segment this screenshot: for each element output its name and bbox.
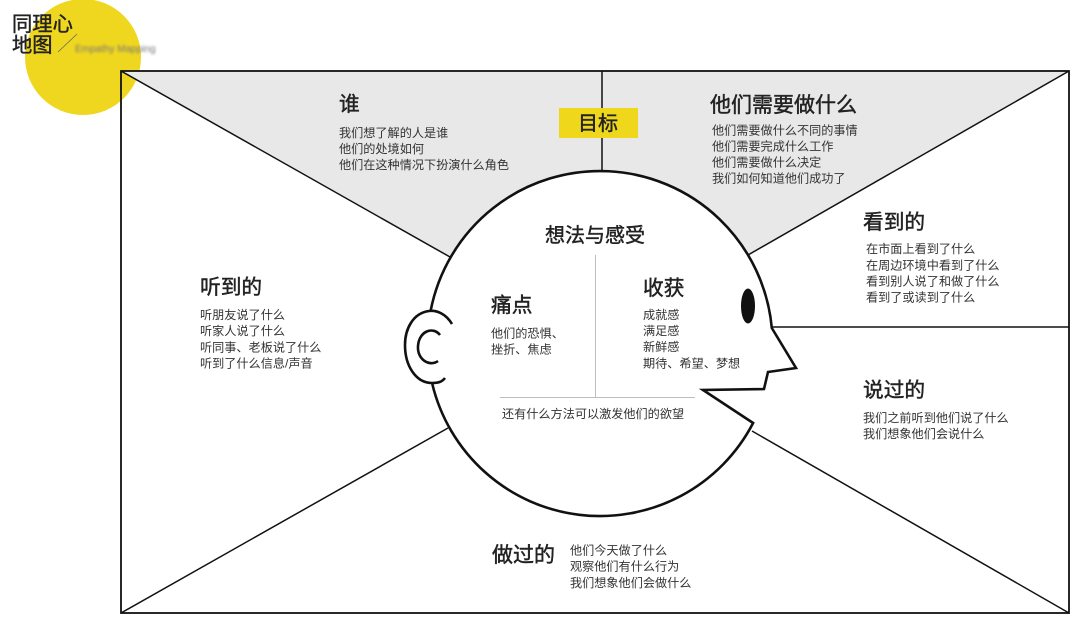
goal label [559,108,638,138]
text block: gains: 成就感 [643,307,679,322]
page title: 同理心 [12,14,73,36]
inner dividers [500,255,695,398]
text block: who: 他们的处境如何 [339,141,424,156]
text block: who: 我们想了解的人是谁 [339,125,448,140]
text block: hear: 听到了什么信息/声音 [200,356,313,370]
text block: see: 看到的 [863,211,925,234]
text block: said [863,379,1009,441]
icon: eye [741,288,755,324]
text block: hear: 听同事、老板说了什么 [200,340,321,354]
text block: do: 我们想象他们会做什么 [570,575,691,590]
icon: ear [405,311,452,383]
text block: said: 我们之前听到他们说了什么 [863,410,1009,425]
text block: who [339,93,509,172]
page title: 地图 [12,34,53,57]
text block: hear [200,276,321,370]
text block: gains: 满足感 [643,323,679,338]
text block: said: 我们想象他们会说什么 [863,426,984,441]
text block: do: 他们今天做了什么 [570,542,667,558]
text block: said: 说过的 [863,379,925,402]
text block: see: 看到别人说了和做了什么 [866,274,1000,288]
text block: hear: 听家人说了什么 [200,323,285,338]
yellow circle [25,0,141,115]
text block: hear: 听朋友说了什么 [200,307,285,322]
text block: pains: 他们的恐惧、 [491,326,564,340]
text block: who: 谁 [339,93,360,116]
text block: what they need to do: 我们如何知道他们成功了 [712,170,846,186]
panel: grey top area [121,71,1069,257]
text block: pains: 痛点 [491,294,532,317]
text block: see: 在周边环境中看到了什么 [866,258,1000,272]
text block: do: 做过的 [492,544,555,567]
heading: thoughts and feelings: 想法与感受 [545,224,645,247]
text block: what they need to do: 他们需要做什么 [710,94,857,117]
text block: what they need to do: 他们需要做什么不同的事情 [712,122,858,138]
text block: gains: 期待、希望、梦想 [643,356,740,370]
text block: what they need to do: 他们需要完成什么工作 [712,138,833,154]
text block: see [863,211,1000,304]
text block: hear: 听到的 [200,276,262,299]
text block: gains: 新鲜感 [643,339,679,354]
text block: pains [491,294,564,356]
text block: pains: 挫折、焦虑 [491,342,552,356]
text block: what they need to do: 他们需要做什么决定 [712,154,821,170]
text block: do: 观察他们有什么行为 [570,558,679,574]
title slash [58,34,77,52]
text block: what they need to do [710,94,858,186]
blurred subtitle: Empathy Mapping [75,44,156,55]
head outline [431,171,796,516]
text block: gains: 收获 [643,277,684,300]
text block: do [492,542,691,590]
text block: motivation: 还有什么方法可以激发他们的欲望 [502,406,684,421]
goal label: 目标 [578,112,618,135]
panel: map frame [121,71,1069,613]
text block: who: 他们在这种情况下扮演什么角色 [339,157,509,172]
text block: gains [643,277,740,370]
page title [12,14,73,57]
text block: see: 在市面上看到了什么 [866,241,975,256]
text block: see: 看到了或读到了什么 [866,290,975,304]
